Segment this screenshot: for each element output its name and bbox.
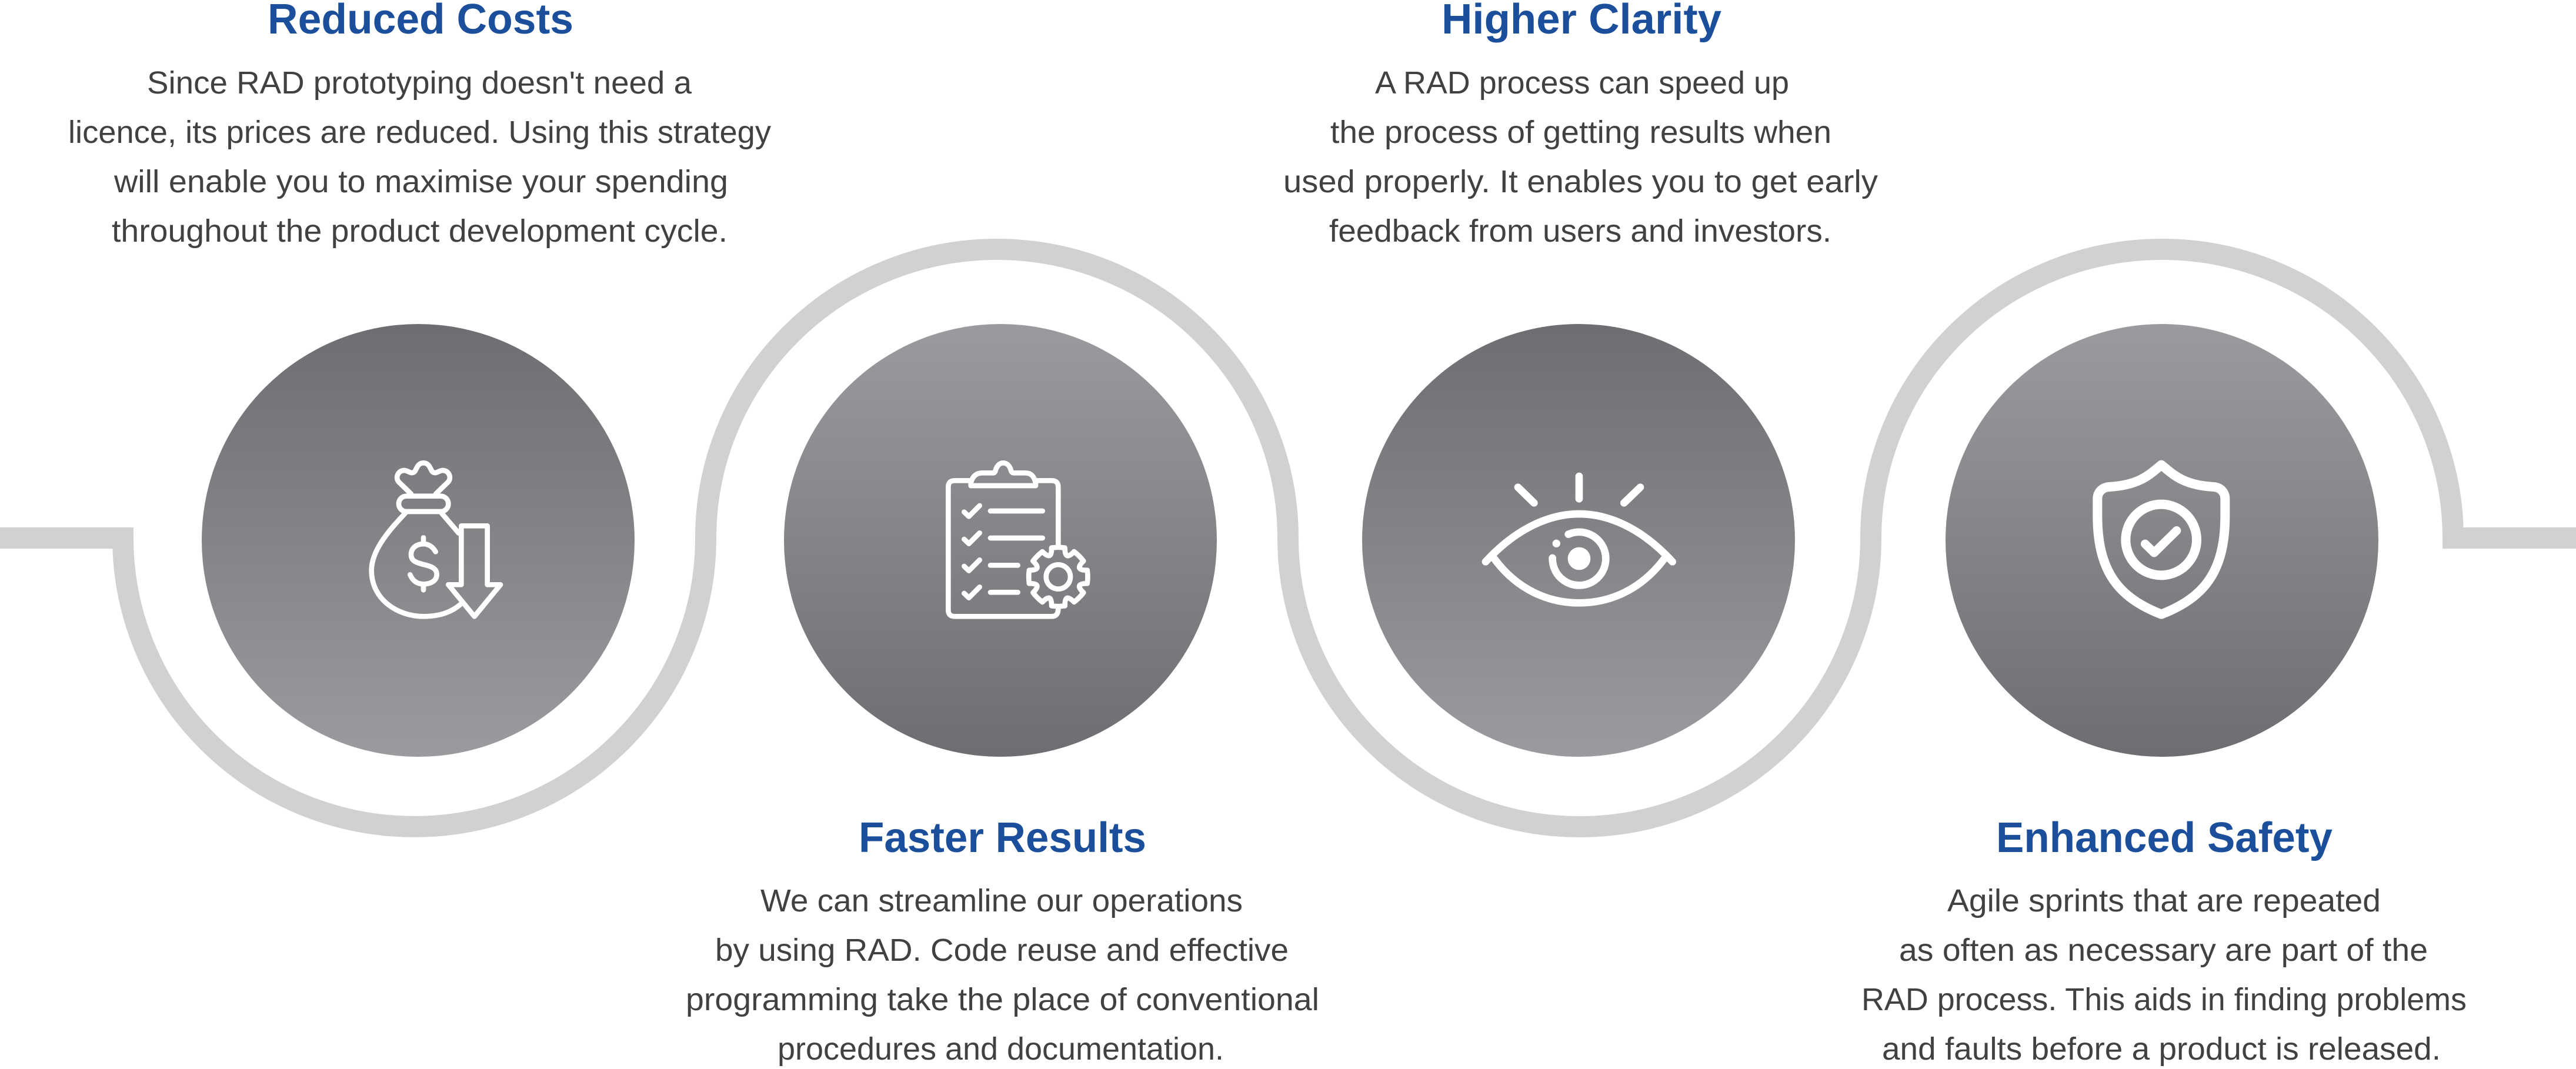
body: enhanced safety: and faults before a product is released. — [1882, 1031, 2441, 1067]
circle: higher clarity — [1362, 324, 1795, 757]
icon: shield with check — [2097, 465, 2225, 614]
text block: enhanced safety — [1861, 814, 2467, 1067]
body: reduced costs: will enable you to maximise your spending — [114, 164, 728, 199]
icon: clipboard with gear — [948, 463, 1090, 616]
text block: higher clarity — [1283, 0, 1878, 249]
body: higher clarity: the process of getting results when — [1330, 115, 1831, 150]
circle: reduced costs — [202, 324, 635, 757]
heading: faster results: Faster Results — [859, 814, 1146, 861]
text block: reduced costs — [68, 0, 771, 249]
body: faster results — [686, 883, 1319, 1067]
heading: enhanced safety: Enhanced Safety — [1996, 814, 2333, 861]
text block: faster results — [686, 814, 1319, 1067]
body: higher clarity — [1283, 65, 1878, 249]
icon: eye with rays — [1486, 476, 1673, 603]
body: reduced costs — [68, 65, 771, 249]
icon: money bag with down arrow — [372, 463, 500, 616]
body: higher clarity: A RAD process can speed up — [1375, 65, 1789, 101]
body: enhanced safety — [1861, 883, 2467, 1067]
body: reduced costs: licence, its prices are reduced. Using this strategy — [68, 115, 771, 150]
body: enhanced safety: RAD process. This aids in finding problems — [1861, 982, 2467, 1017]
circle: enhanced safety — [1946, 324, 2378, 757]
body: enhanced safety: as often as necessary are part of the — [1899, 933, 2428, 968]
body: reduced costs: Since RAD prototyping doesn't need a — [147, 65, 692, 101]
body: faster results: programming take the place of conventional — [686, 982, 1319, 1017]
body: reduced costs: throughout the product development cycle. — [112, 213, 728, 249]
body: faster results: by using RAD. Code reuse and effective — [715, 933, 1289, 968]
body: higher clarity: used properly. It enables you to get early — [1283, 164, 1878, 199]
wavy connector line — [0, 249, 2576, 827]
body: enhanced safety: Agile sprints that are repeated — [1947, 883, 2381, 918]
circle: faster results — [784, 324, 1217, 757]
body: higher clarity: feedback from users and investors. — [1329, 213, 1831, 249]
body: faster results: We can streamline our operations — [760, 883, 1243, 918]
body: faster results: procedures and documentation. — [778, 1031, 1224, 1067]
